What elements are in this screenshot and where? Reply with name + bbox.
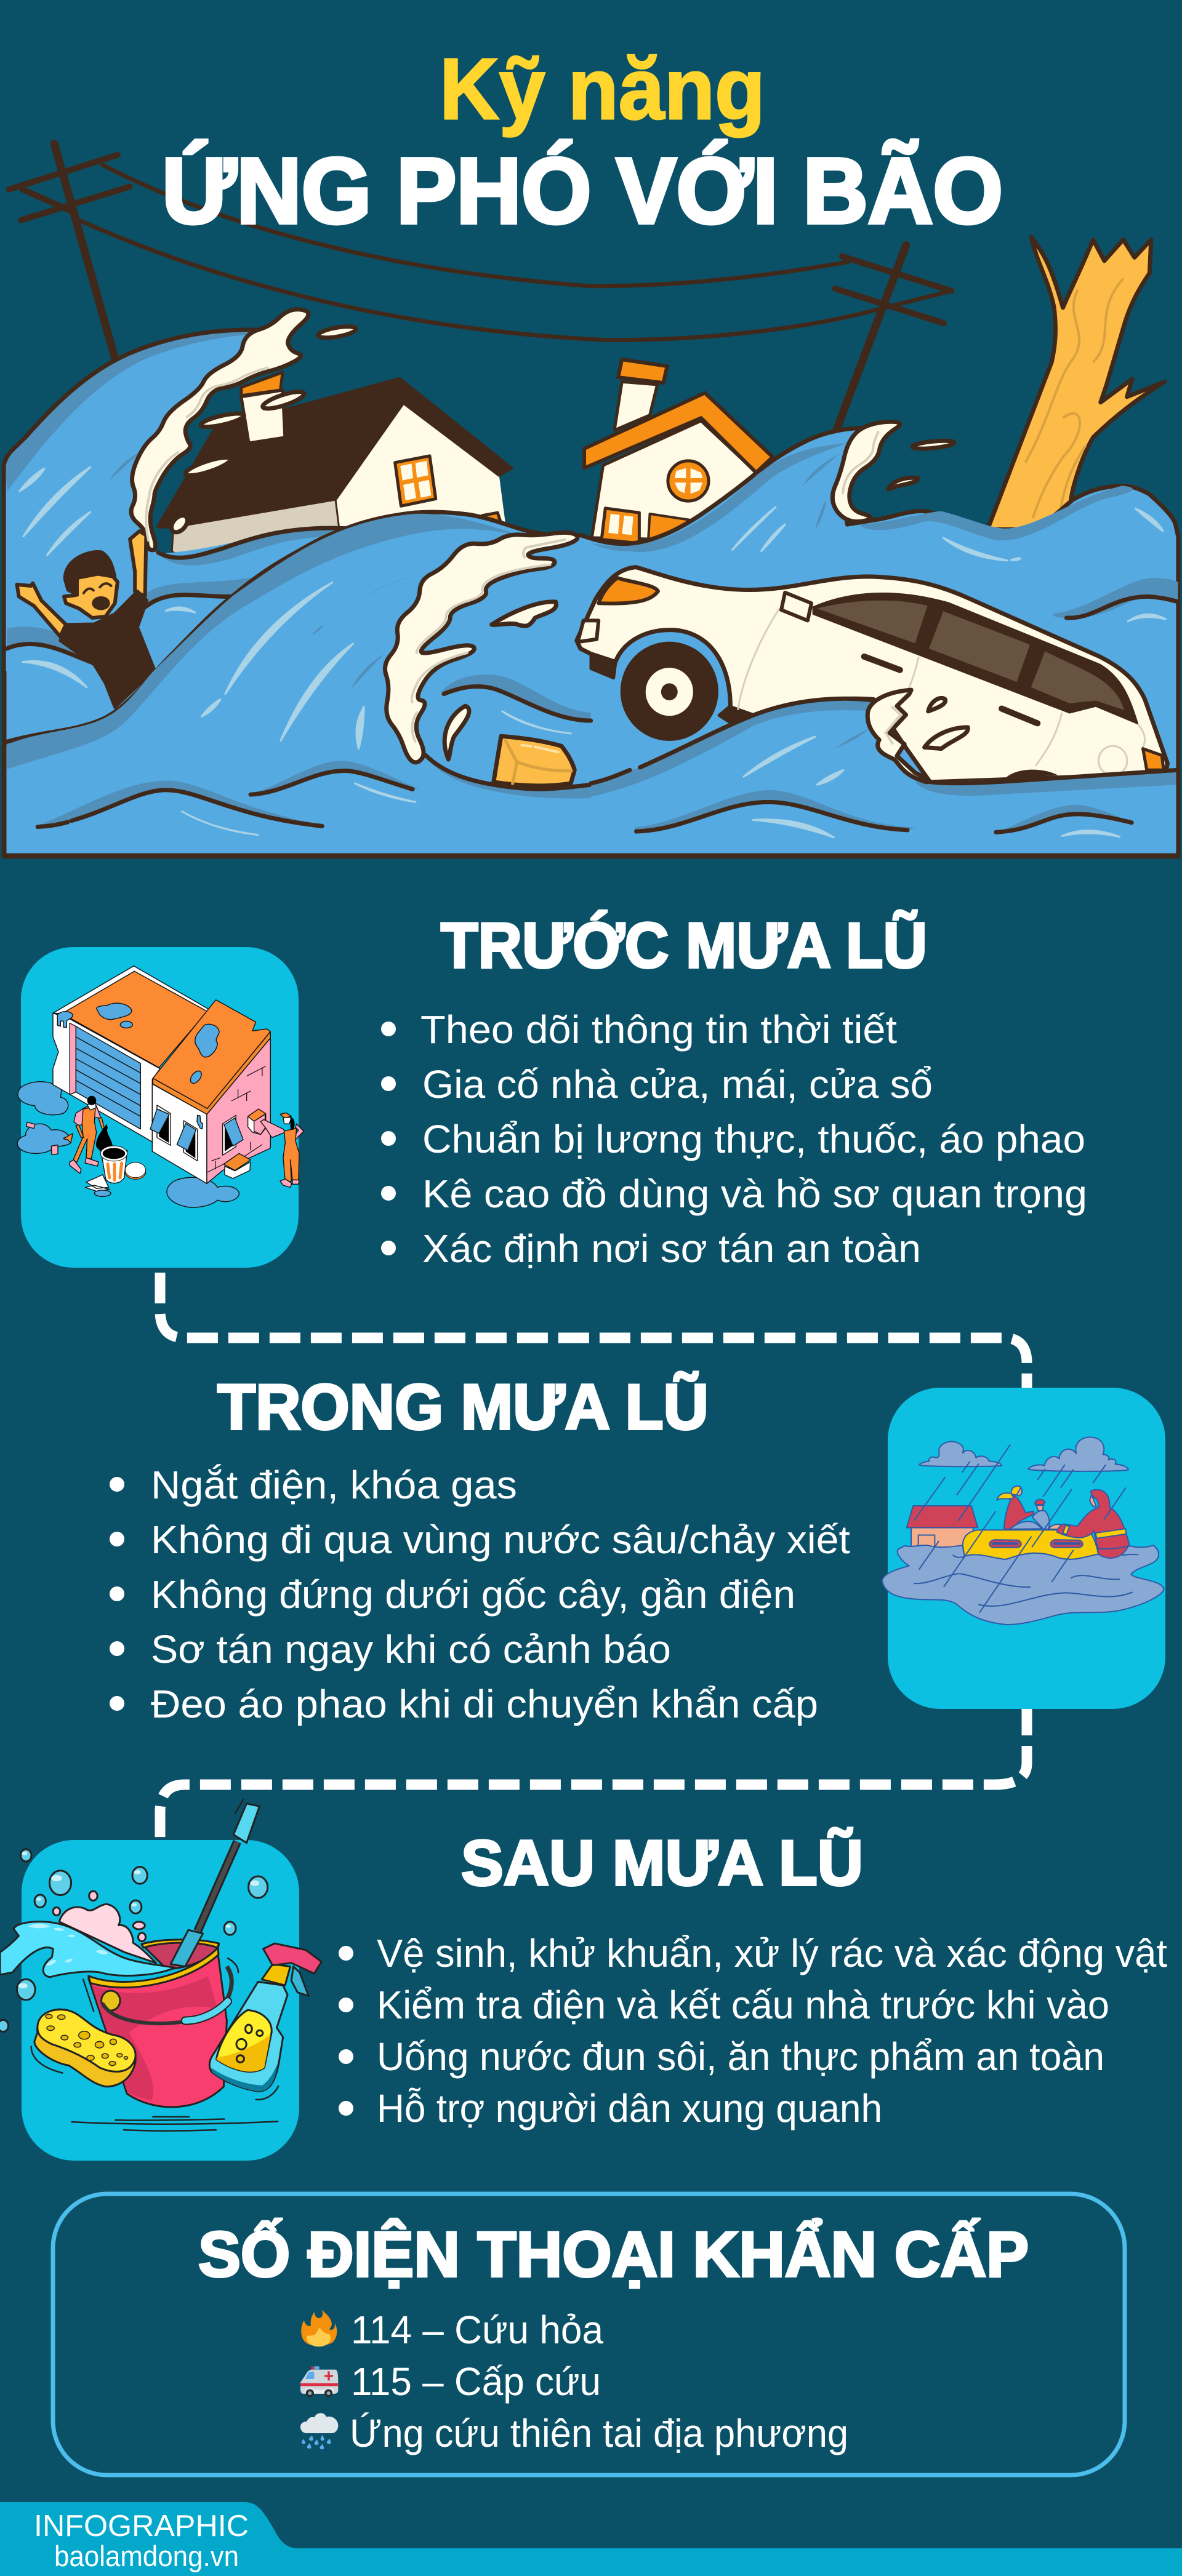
title line: Ứng phó với bão: ỨNG PHÓ VỚI BÃO (162, 138, 1003, 242)
bullet list: after: Vệ sinh, khử khuẩn, xử lý rác và xác động vật (377, 1931, 1167, 1975)
icon: right utility pole (835, 245, 951, 429)
illustration: flood scene (4, 144, 1178, 857)
heading: Trước mưa lũ: TRƯỚC MƯA LŨ (441, 910, 927, 982)
text: fire hotline: 114 – Cứu hỏa (351, 2308, 603, 2352)
icon: drowning person (17, 531, 155, 707)
icon: orange roof house (584, 359, 773, 543)
icon card: rescue boat (882, 1388, 1165, 1709)
water: main front wave (4, 428, 1178, 857)
bullet list: during: Ngắt điện, khóa gas (151, 1463, 517, 1507)
icon card: cleaning bucket (0, 1799, 321, 2161)
panel: before the flood (17, 910, 1087, 1271)
footer label: INFOGRAPHIC (34, 2510, 249, 2543)
icon: left utility pole (9, 144, 130, 365)
water: lower front wave over car (591, 698, 1178, 852)
foam: splash on car (867, 690, 928, 782)
bullet list: during: Sơ tán ngay khi có cảnh báo (151, 1627, 671, 1671)
bullet list: before: Kê cao đồ dùng và hồ sơ quan trọng (422, 1172, 1087, 1216)
text: ambulance hotline: 115 – Cấp cứu (351, 2359, 601, 2404)
icon: cardboard box (494, 736, 574, 786)
title line: Kỹ năng: Kỹ năng (440, 40, 765, 137)
panel: emergency numbers (53, 2194, 1125, 2475)
title (162, 40, 1003, 242)
icon: flooded car (577, 567, 1167, 782)
bullet list: during (110, 1463, 850, 1726)
arrow: dashed connector from during to after (160, 1705, 1027, 1846)
icon: fire (301, 2310, 337, 2346)
bullet list: after: Kiểm tra điện và kết cấu nhà trước khi vào (377, 1983, 1109, 2027)
bullet list: during: Không đứng dưới gốc cây, gần điện (151, 1572, 795, 1617)
heading: emergency phone numbers: SỐ ĐIỆN THOẠI KHẨN CẤP (198, 2219, 1029, 2290)
bullet list: during: Không đi qua vùng nước sâu/chảy xiết (151, 1518, 850, 1562)
foam: centre wave crest (385, 532, 577, 762)
bullet list: before: Xác định nơi sơ tán an toàn (422, 1226, 921, 1271)
foam: right wave crest (832, 422, 955, 522)
power lines (79, 164, 951, 340)
frame edge (4, 671, 1178, 855)
icon: dark roof house (158, 372, 511, 556)
bullet list: after: Uống nước đun sôi, ăn thực phẩm an toàn (377, 2034, 1104, 2079)
heading: Sau mưa lũ: SAU MƯA LŨ (461, 1828, 863, 1899)
arrow: dashed connector from before to during (160, 1273, 1027, 1397)
bullet list: after: Hỗ trợ người dân xung quanh (377, 2086, 882, 2130)
text: local disaster relief: Ứng cứu thiên tai địa phương (350, 2411, 848, 2455)
bullet list: during: Đeo áo phao khi di chuyển khẩn cấp (151, 1682, 818, 1726)
panel: during the flood (110, 1372, 1165, 1726)
bullet list: before (381, 1007, 1087, 1271)
panel: after the flood (0, 1799, 1167, 2161)
bullet list: before: Theo dõi thông tin thời tiết (420, 1007, 897, 1052)
water details right (591, 443, 1178, 622)
bullet list: after (339, 1931, 1167, 2130)
icon: ambulance (300, 2366, 338, 2398)
bullet list: before: Gia cố nhà cửa, mái, cửa sổ (422, 1062, 933, 1106)
heading: Trong mưa lũ: TRONG MƯA LŨ (217, 1372, 709, 1443)
foam: left wave crest (131, 310, 358, 550)
footer site name: baolamdong.vn (54, 2540, 239, 2572)
water details behind person (7, 451, 347, 687)
footer band (0, 2502, 1182, 2576)
icon card: house repair (17, 947, 304, 1268)
bullet list: before: Chuẩn bị lương thực, thuốc, áo phao (422, 1117, 1085, 1161)
icon: broken tree (987, 237, 1165, 529)
water: left back wave (4, 330, 452, 857)
icon: rain cloud (300, 2413, 338, 2449)
water shading and ripples, left (7, 514, 591, 835)
